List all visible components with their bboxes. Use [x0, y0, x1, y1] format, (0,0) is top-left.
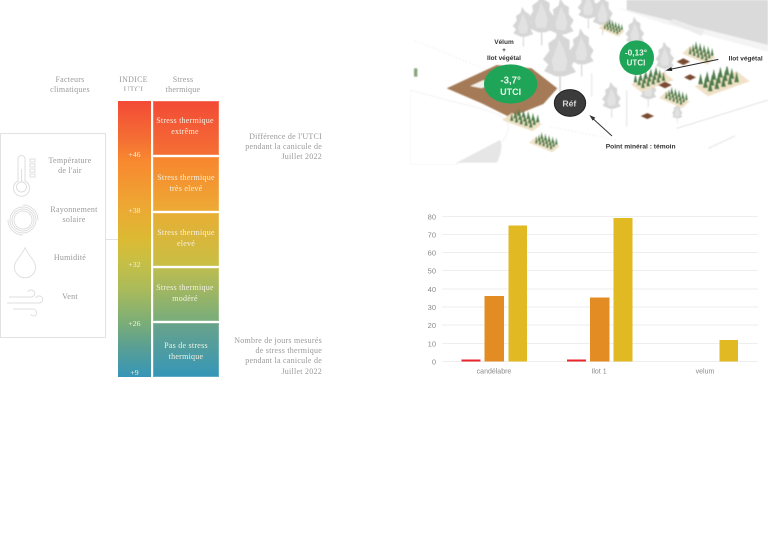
heading: stress thermique	[166, 74, 200, 94]
dashed paths	[415, 41, 768, 148]
connector line	[105, 239, 118, 240]
label: velum + ilot vegetal: Vélum	[494, 39, 514, 46]
heading: stress thermique: Stress	[173, 74, 193, 84]
badge: ilot -0.13	[619, 40, 654, 75]
y axis labels: 60	[428, 248, 436, 258]
group: candélabre: candélabre	[477, 368, 511, 376]
label: very high	[157, 173, 215, 193]
stress box: none	[153, 323, 219, 377]
heading: indice UTCI	[119, 74, 148, 91]
group: candélabre	[462, 226, 527, 376]
stress box: extreme	[153, 101, 219, 155]
label: velum + ilot vegetal	[487, 39, 521, 62]
label: température de l'air: de l'air	[58, 166, 82, 175]
label: extreme: extrême	[171, 127, 199, 136]
scale value +46: +46	[128, 150, 141, 159]
label: humidité: Humidité	[54, 252, 86, 262]
label: rayonnement solaire: Rayonnement	[50, 204, 98, 214]
heading: stress thermique: thermique	[166, 85, 200, 94]
caption: UTCI difference: Juillet 2022	[281, 152, 322, 161]
icon: solar radiation	[8, 204, 38, 236]
label: very high: Stress thermique	[157, 173, 215, 182]
scale value +26: +26	[128, 319, 141, 328]
badge text: -3,7°	[500, 75, 521, 86]
label: none: thermique	[169, 352, 203, 361]
badge text: Réf	[562, 98, 576, 108]
y axis labels: 10	[428, 340, 436, 348]
heading: facteurs climatiques: climatiques	[50, 85, 90, 94]
badge text: -0,13°	[625, 47, 647, 57]
icon: thermometer	[13, 155, 36, 197]
label: rayonnement solaire: solaire	[62, 215, 86, 224]
trees	[513, 0, 682, 123]
caption: measured days: pendant la canicule de	[245, 356, 322, 365]
caption: measured days: Nombre de jours mesurés	[234, 336, 322, 344]
heading: facteurs climatiques: Facteurs	[55, 74, 85, 84]
caption: measured days: Juillet 2022	[281, 367, 322, 376]
badge: velum -3.7: UTCI	[500, 87, 521, 97]
arrow: point mineral	[589, 115, 612, 136]
stress box: very high	[153, 157, 219, 211]
caption: measured days	[234, 336, 322, 376]
group: velum	[696, 340, 738, 376]
label: température de l'air	[48, 156, 92, 175]
panel: climatic factors	[0, 132, 106, 338]
stress box: high	[153, 213, 219, 266]
heading: facteurs climatiques	[50, 74, 90, 94]
label: rayonnement solaire	[50, 204, 98, 224]
label: vent: Vent	[62, 292, 78, 300]
heading: indice UTCI: INDICE	[119, 74, 148, 84]
label: velum + ilot vegetal: +	[502, 47, 506, 54]
building	[613, 0, 768, 52]
badge: reference	[554, 90, 586, 116]
label: high	[157, 228, 215, 248]
y axis labels: 30	[428, 303, 436, 312]
label: point mineral: Point minéral : témoin	[606, 143, 676, 150]
y axis labels: 20	[428, 321, 436, 330]
icon: wind	[7, 290, 44, 316]
label: none: Pas de stress	[164, 341, 208, 350]
label: velum + ilot vegetal: Ilot végétal	[487, 55, 521, 62]
y axis labels	[428, 212, 436, 366]
icon: water drop	[14, 247, 36, 278]
y axis labels: 80	[428, 212, 436, 222]
label: ilot vegetal: Ilot végétal	[729, 56, 763, 63]
label: very high: très elevé	[170, 184, 202, 193]
label: ilot vegetal	[719, 52, 768, 66]
label: extreme: Stress thermique	[156, 116, 214, 125]
caption: measured days: de stress thermique	[255, 346, 322, 355]
y axis labels: 70	[428, 230, 436, 240]
label: high: Stress thermique	[157, 228, 215, 237]
caption: UTCI difference: Différence de l'UTCI	[249, 132, 322, 140]
map: site illustration	[410, 0, 768, 164]
velum roof	[447, 65, 557, 117]
label: température de l'air: Température	[48, 156, 92, 164]
caption: UTCI difference	[245, 132, 322, 161]
label: extreme	[156, 116, 214, 136]
group: velum: velum	[696, 368, 714, 376]
bar chart	[428, 65, 758, 376]
y axis labels: 40	[428, 285, 436, 294]
label: moderate: modéré	[172, 294, 198, 303]
y axis labels: 50	[428, 266, 436, 276]
group: ilot 1	[567, 218, 632, 376]
arrow: ilot vegetal	[665, 59, 718, 71]
caption: UTCI difference: pendant la canicule de	[245, 142, 322, 151]
scale value +9: +9	[130, 368, 139, 377]
y axis labels: 0	[432, 358, 436, 366]
scale value +32: +32	[128, 260, 141, 269]
badge: ilot -0.13: UTCI	[627, 58, 645, 67]
label: high: elevé	[177, 239, 195, 248]
group: ilot 1: Ilot 1	[591, 368, 607, 376]
badge: velum -3.7	[484, 64, 537, 104]
label: none	[164, 341, 208, 361]
label: moderate: Stress thermique	[156, 283, 214, 292]
scale value +38: +38	[128, 206, 141, 215]
UTCI gradient scale	[118, 101, 151, 377]
planters	[414, 19, 750, 108]
brown planters	[641, 58, 696, 119]
label: moderate	[156, 283, 214, 303]
white building curve	[410, 90, 508, 165]
stress box: moderate	[153, 268, 219, 321]
